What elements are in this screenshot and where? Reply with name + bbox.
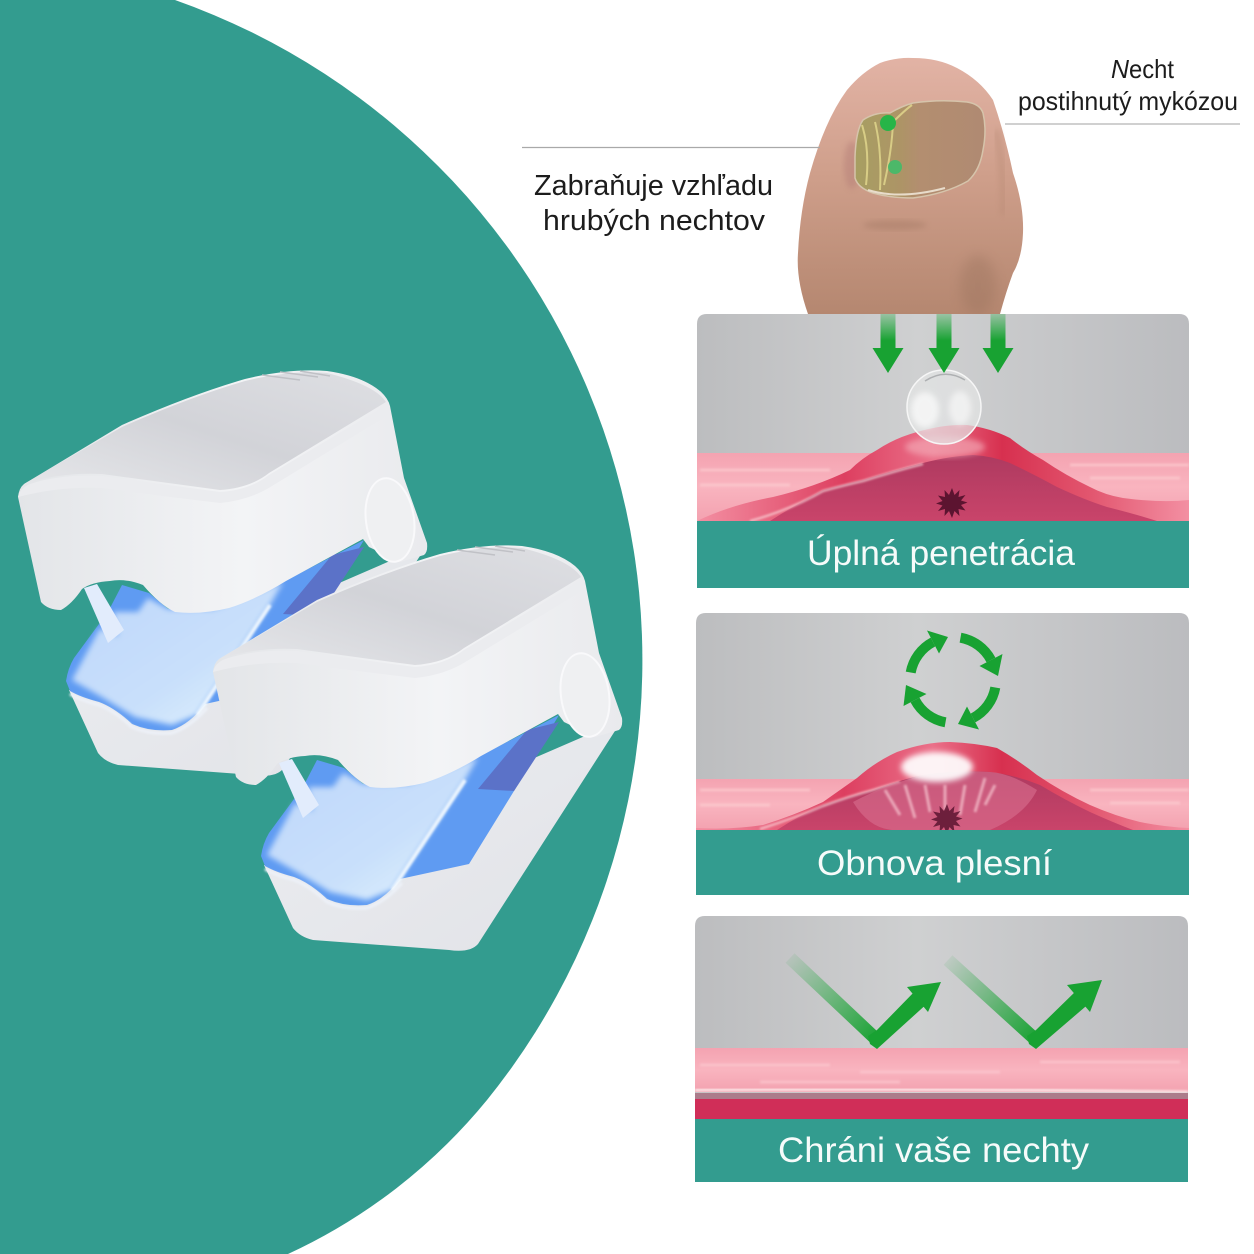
panel 3 illustration: [695, 916, 1188, 1119]
green bounce arrow 1: [790, 958, 941, 1049]
back device top surface: [24, 372, 386, 490]
panel: full penetration: [697, 314, 1189, 588]
callout text: affected nail: echt: [1129, 54, 1175, 84]
product: back nail lamp device: [18, 370, 427, 776]
back device rod: [84, 584, 124, 643]
back device dial: [360, 475, 420, 565]
light burst: [885, 752, 995, 818]
callout text: affected nail: N: [1111, 54, 1129, 84]
green arrows down: [872, 314, 1014, 373]
callout text: prevents rough nails: Zabraňuje vzhľadu: [534, 170, 773, 202]
fungus star: [931, 804, 962, 830]
callout text: affected nail: postihnutý mykózou: [1018, 86, 1238, 116]
treatment lens: [853, 771, 1037, 830]
fungus star: [936, 488, 968, 518]
toe illustration: [798, 58, 1023, 315]
panel 3 label bar: [695, 1119, 1188, 1182]
front device dial: [555, 650, 615, 740]
teal background circle: [0, 0, 642, 1254]
callout line: left: [522, 146, 820, 148]
droplet: [907, 370, 981, 444]
green cycle arrows: [904, 630, 1002, 730]
back device blue plate: [66, 540, 364, 733]
panel 2 label: Obnova plesní: [817, 844, 1052, 883]
panel 2 illustration: [696, 613, 1189, 834]
panel 1 label bar: [697, 521, 1189, 588]
callout line: right: [1005, 123, 1240, 125]
product: front nail lamp device: [213, 545, 622, 951]
panel 1 label: Úplná penetrácia: [807, 534, 1076, 573]
panel: protects nails: [695, 916, 1188, 1182]
callout text: prevents rough nails: hrubých nechtov: [543, 205, 766, 237]
back device body: [18, 370, 427, 613]
panel 3 label: Chráni vaše nechty: [778, 1131, 1090, 1170]
back device base: [69, 545, 427, 776]
front device base: [264, 720, 622, 951]
panel 2 label bar: [696, 830, 1189, 895]
front device rod: [279, 759, 319, 818]
toe skin: [798, 58, 1023, 314]
green bounce arrow 2: [948, 960, 1102, 1049]
infected toenail: [855, 101, 985, 198]
green markers on nail: [880, 115, 896, 131]
panel: mold renewal: [696, 613, 1189, 895]
front device body: [213, 545, 622, 788]
panel 1 illustration: [697, 314, 1189, 521]
front device top surface: [219, 547, 581, 665]
front device blue plate: [261, 715, 559, 908]
